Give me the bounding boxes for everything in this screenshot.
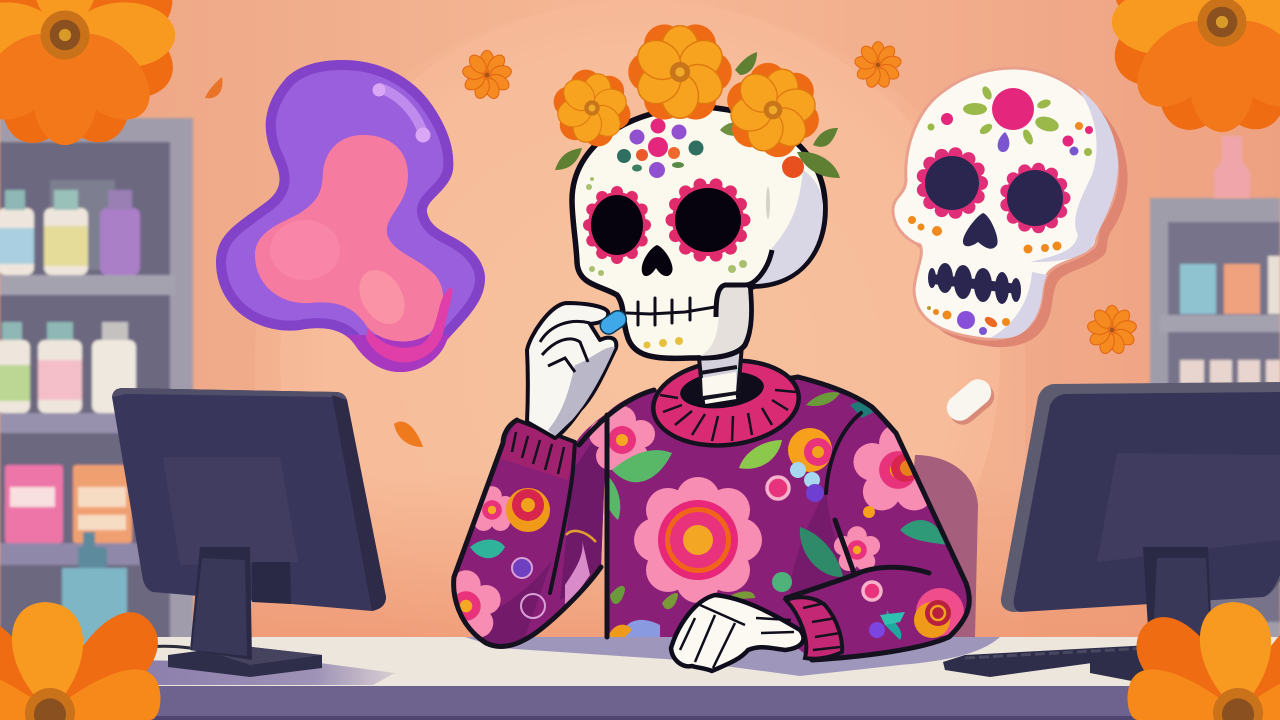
right sleeve cuff: [786, 597, 842, 659]
forehead decoration: [586, 118, 747, 348]
chair back: [900, 455, 978, 637]
blue pill in hand: [597, 307, 630, 337]
left sleeve cuff: [498, 420, 575, 480]
sweater dots and rings: [512, 477, 905, 640]
sleeve and body flowers: [431, 406, 964, 638]
right pharmacy shelf: [1150, 198, 1280, 638]
left monitor: [112, 388, 386, 611]
white pill: [941, 374, 1000, 430]
right monitor stand: [1090, 547, 1213, 682]
resting skeleton hand: [671, 595, 804, 671]
left monitor stand: [168, 547, 322, 677]
nose: [642, 245, 673, 276]
sweater leaves: [470, 392, 947, 609]
left pharmacy shelf: [0, 118, 193, 646]
skull teeth: [928, 263, 1021, 304]
sweater outlines: [454, 377, 969, 660]
eye sockets: [588, 184, 744, 258]
floating sugar skull: [893, 68, 1128, 347]
skull head: [572, 107, 825, 358]
turtleneck collar: [649, 354, 803, 452]
medicine boxes: [5, 465, 132, 543]
raised skeleton hand with pill: [527, 303, 630, 438]
bottles top row: [0, 190, 140, 275]
flower crown: [543, 17, 840, 178]
purple abstract blob: [216, 60, 485, 380]
pink vase on the right: [1214, 136, 1250, 198]
keyboard: [943, 645, 1150, 677]
floating small flowers and petals: [205, 42, 1137, 447]
neck: [698, 345, 742, 402]
main sweater flower: [634, 477, 762, 603]
skull eyes: [922, 153, 1065, 228]
spray bottle: [62, 532, 127, 646]
skull decorations: [908, 85, 1093, 335]
sweater: [431, 17, 969, 671]
skull nose: [963, 213, 998, 249]
right monitor: [1001, 382, 1280, 612]
bottles middle row: [0, 322, 136, 413]
desk: [125, 637, 1280, 720]
teeth: [627, 298, 715, 325]
